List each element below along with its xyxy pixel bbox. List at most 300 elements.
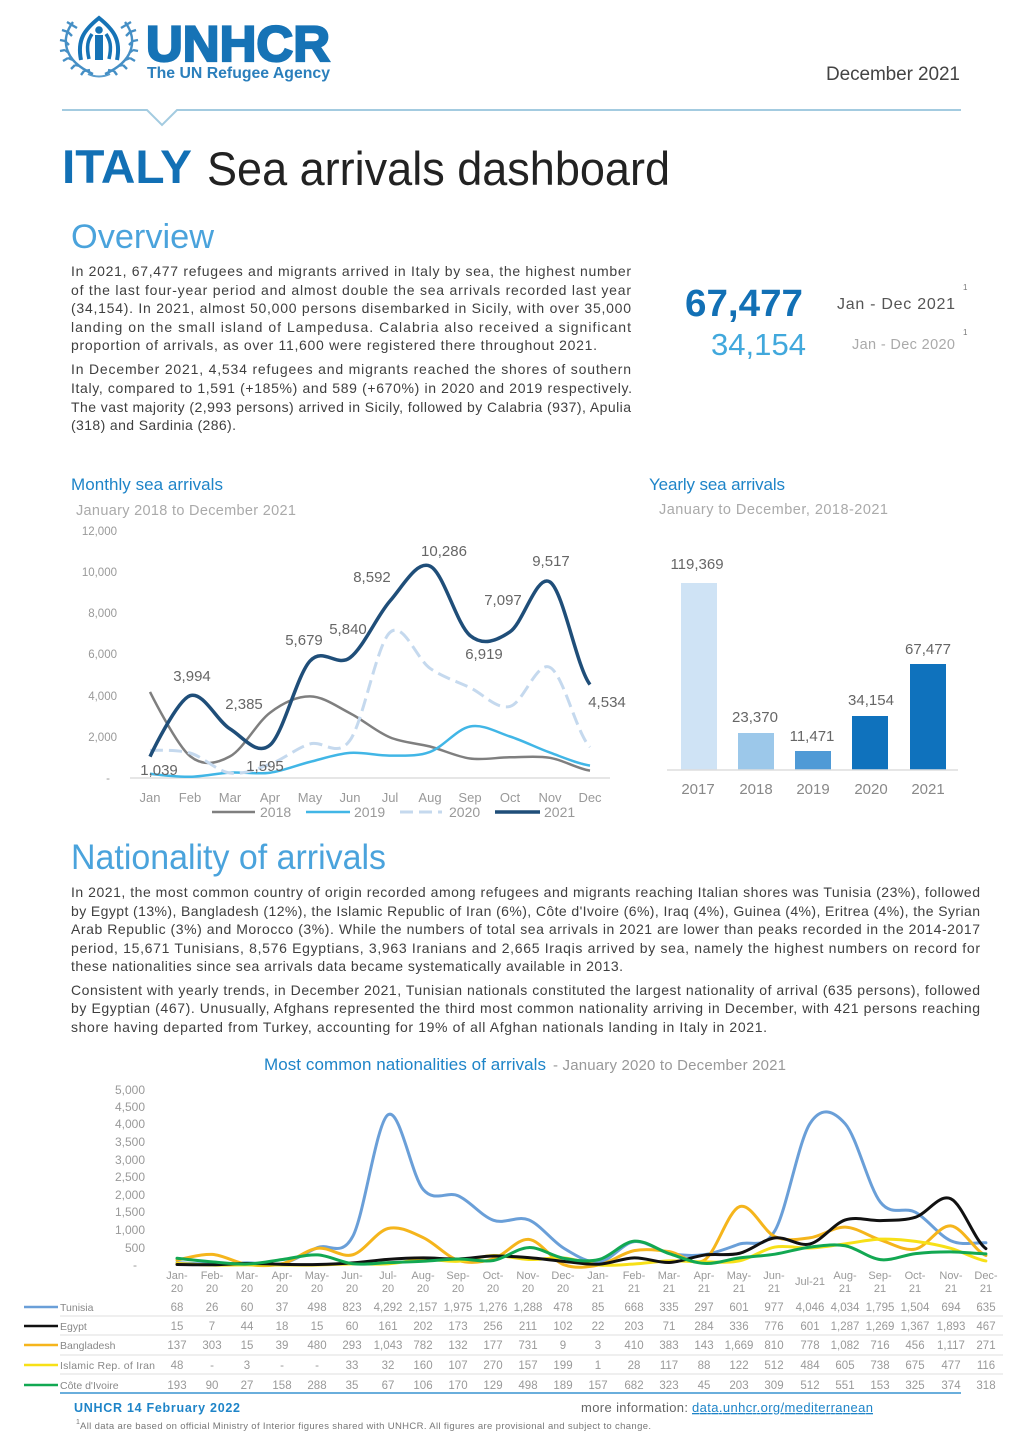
table row: Côte d'Ivoire: 325 [905, 1380, 925, 1392]
data labels: 7,097 [484, 592, 522, 609]
line chart: monthly arrivals [82, 526, 626, 820]
line chart: nationalities: Mar- [658, 1270, 681, 1282]
text block: overview: In December 2021, 4,534 refugees and migrants reached the shores of southern [71, 361, 631, 377]
table row: Egypt: 211 [519, 1321, 537, 1333]
data labels: 2,385 [225, 696, 263, 713]
line: 2018 [150, 692, 590, 771]
line chart: nationalities: Nov- [516, 1270, 540, 1282]
bar chart: yearly arrivals: 34,154 [848, 692, 894, 709]
table row: Islamic Rep. of Iran: 484 [800, 1360, 820, 1372]
icon: UNHCR emblem [60, 18, 138, 76]
line chart: nationalities: Jan- [166, 1270, 188, 1282]
table row: Tunisia: 85 [592, 1302, 604, 1314]
legend: 2018 [260, 804, 291, 820]
line chart: nationalities: Apr- [272, 1270, 293, 1282]
table row: Islamic Rep. of Iran: 270 [483, 1360, 503, 1372]
line chart: monthly arrivals: 6,000 [88, 649, 117, 661]
table row: Tunisia: 977 [764, 1302, 784, 1314]
data labels: 1,595 [246, 758, 284, 775]
title: ITALY [62, 140, 192, 193]
table row: Bangladesh: 1,669 [725, 1340, 753, 1352]
line chart: monthly arrivals: Feb [179, 790, 201, 805]
line chart: nationalities: 20 [241, 1283, 253, 1295]
line chart: nationalities: 20 [276, 1283, 288, 1295]
table row: Islamic Rep. of Iran: 3 [244, 1360, 250, 1372]
table row: Tunisia: 4,292 [374, 1302, 402, 1314]
logo wordmark: UNHCR [146, 16, 330, 72]
line: 2021 [150, 565, 590, 757]
line chart: monthly arrivals: Apr [260, 790, 281, 805]
text block: overview: proportion of arrivals, as over 11,600 were registered there throughout 2021. [71, 337, 597, 353]
table row: Egypt: 256 [483, 1321, 503, 1333]
subheading: yearly: January to December, 2018-2021 [659, 502, 888, 518]
data labels: 10,286 [421, 543, 467, 560]
line chart: nationalities: 3,000 [115, 1153, 145, 1167]
table row: Bangladesh: 15 [241, 1340, 253, 1352]
text block: nationality: shore having departed from Turkey, accounting for 19% of all Afghan nationals landing in Italy in 2021. [71, 1019, 767, 1035]
table row: Côte d'Ivoire: 309 [764, 1380, 784, 1392]
text block: overview: landing on the small island of Lampedusa. Calabria also received a significant [71, 319, 631, 335]
table row: Islamic Rep. of Iran: 107 [448, 1360, 468, 1372]
table row: Islamic Rep. of Iran: 122 [729, 1360, 749, 1372]
heading: monthly: Monthly sea arrivals [71, 475, 223, 494]
table row: Bangladesh: 1,043 [374, 1340, 402, 1352]
table row: Côte d'Ivoire: 67 [382, 1380, 394, 1392]
line chart: nationalities: 20 [206, 1283, 218, 1295]
table row: Bangladesh: 132 [448, 1340, 468, 1352]
chart heading: Most common nationalities of arrivals [264, 1055, 546, 1074]
table row: Egypt: Egypt [60, 1321, 87, 1333]
panel: yearly sea arrivals [649, 475, 958, 798]
bar chart: yearly arrivals: 11,471 [790, 728, 834, 745]
table row: Bangladesh: 271 [976, 1340, 996, 1352]
callout: totals [685, 283, 968, 362]
text block: overview: of the last four-year period and almost double the sea arrivals recorded last year [71, 282, 631, 298]
table row: Bangladesh: 143 [694, 1340, 714, 1352]
table row: Côte d'Ivoire: 158 [272, 1380, 292, 1392]
line chart: nationalities: - [133, 1258, 137, 1272]
line chart: monthly arrivals: Jul [382, 790, 398, 805]
line chart: nationalities: 21 [663, 1283, 675, 1295]
bar chart: yearly arrivals: 2019 [796, 781, 830, 798]
bar chart: yearly arrivals: 2017 [681, 781, 715, 798]
line chart: nationalities: Sep- [446, 1270, 470, 1282]
line: Bangladesh [177, 1206, 986, 1267]
table row: Egypt: 336 [729, 1321, 749, 1333]
table row: Tunisia: 1,288 [514, 1302, 542, 1314]
text block: overview: Italy, compared to 1,591 (+185%) and 589 (+670%) in 2020 and 2019 respectively. [71, 380, 632, 396]
table row: Bangladesh: 731 [518, 1340, 538, 1352]
table row: Egypt: 202 [413, 1321, 433, 1333]
line chart: nationalities: 2,000 [115, 1188, 145, 1202]
line chart: nationalities: 20 [487, 1283, 499, 1295]
table row: Egypt: 1,269 [866, 1321, 894, 1333]
table row: Côte d'Ivoire: 153 [870, 1380, 890, 1392]
table row: Egypt: 71 [663, 1321, 675, 1333]
data labels: 1,039 [140, 762, 178, 779]
table row: Tunisia: 823 [342, 1302, 362, 1314]
table row: Egypt: 22 [592, 1321, 604, 1333]
heading: overview: Overview [71, 218, 214, 256]
table row: Bangladesh: 137 [167, 1340, 187, 1352]
table row: Islamic Rep. of Iran: - [315, 1360, 319, 1372]
text block: nationality: In 2021, the most common country of origin recorded among refugees and migrants reaching Italian shores was Tunisia (23%), followed [71, 884, 980, 900]
heading: yearly: Yearly sea arrivals [649, 475, 785, 494]
line chart: nationalities: 21 [698, 1283, 710, 1295]
date: December 2021 [826, 64, 960, 85]
callout: totals: Jan - Dec 2020 [852, 337, 955, 353]
table row: Tunisia: Tunisia [60, 1302, 94, 1314]
table row: Tunisia: 4,034 [831, 1302, 860, 1314]
table row: Côte d'Ivoire: 170 [448, 1380, 468, 1392]
line chart: nationalities: Aug- [833, 1270, 857, 1282]
table row: Bangladesh [24, 1340, 996, 1352]
line chart: nationalities: 21 [909, 1283, 921, 1295]
table row: Tunisia: 297 [694, 1302, 714, 1314]
table row: Tunisia: 335 [659, 1302, 679, 1314]
table row: Côte d'Ivoire: 512 [800, 1380, 820, 1392]
bar chart: yearly arrivals: 2018 [739, 781, 773, 798]
table row: Islamic Rep. of Iran: - [210, 1360, 214, 1372]
table row: Bangladesh: 177 [483, 1340, 503, 1352]
data labels: 3,994 [173, 668, 211, 685]
line chart: monthly arrivals: 10,000 [82, 567, 117, 579]
line chart: nationalities: 500 [125, 1241, 145, 1255]
table row: Islamic Rep. of Iran: 33 [346, 1360, 358, 1372]
line chart: nationalities: 20 [346, 1283, 358, 1295]
line chart: nationalities: Apr- [694, 1270, 715, 1282]
table row: Islamic Rep. of Iran: 1 [595, 1360, 601, 1372]
line chart: nationalities: 20 [417, 1283, 429, 1295]
table row: Tunisia: 498 [307, 1302, 327, 1314]
data labels: 8,592 [353, 569, 391, 586]
text block: nationality [71, 884, 980, 1035]
table row: Egypt [24, 1321, 996, 1333]
table row: Côte d'Ivoire: 189 [553, 1380, 573, 1392]
more information link: more information: [581, 1400, 688, 1415]
line chart: nationalities: 1,000 [115, 1223, 145, 1237]
table row: Tunisia: 4,046 [796, 1302, 824, 1314]
table row: Côte d'Ivoire: 45 [698, 1380, 710, 1392]
more information link [581, 1400, 873, 1415]
line chart: nationalities: May- [727, 1270, 752, 1282]
table row: Egypt: 776 [764, 1321, 784, 1333]
line chart: monthly arrivals: May [298, 790, 323, 805]
data labels: 9,517 [532, 553, 570, 570]
logo tagline: The UN Refugee Agency [147, 65, 330, 82]
table row: Côte d'Ivoire: 374 [941, 1380, 961, 1392]
text block: overview [71, 263, 632, 433]
line chart: nationalities: 3,500 [115, 1135, 145, 1149]
data labels: 5,679 [285, 632, 323, 649]
table row: Côte d'Ivoire: 682 [624, 1380, 644, 1392]
data labels [140, 543, 626, 779]
data labels: 5,840 [329, 621, 367, 638]
line chart: monthly arrivals: Sep [458, 790, 482, 805]
table row: Bangladesh: 293 [342, 1340, 362, 1352]
line chart: nationalities: Oct- [483, 1270, 504, 1282]
table row: Egypt: 44 [241, 1321, 254, 1333]
chart heading: - January 2020 to December 2021 [553, 1057, 786, 1074]
line chart: nationalities: Jun- [341, 1270, 363, 1282]
table row: Tunisia: 37 [276, 1302, 288, 1314]
data labels: 4,534 [588, 694, 626, 711]
table row: Egypt: 173 [448, 1321, 468, 1333]
line chart: monthly arrivals: Nov [538, 790, 562, 805]
table row: Bangladesh: 810 [764, 1340, 784, 1352]
line chart: nationalities: 20 [452, 1283, 464, 1295]
table row: Côte d'Ivoire: 203 [729, 1380, 749, 1392]
source credit: UNHCR 14 February 2022 [74, 1401, 240, 1415]
text block: nationality: by Egyptian (467). Unusually, Afghans represented the third most common nationality arriving in December, with 421 persons reaching [71, 1000, 980, 1016]
line chart: nationalities: Mar- [236, 1270, 259, 1282]
text block: nationality: Consistent with yearly trends, in December 2021, Tunisian nationals constituted the largest nationality of arrival (635 persons), followed [71, 982, 980, 998]
bar chart: yearly arrivals: 119,369 [670, 556, 724, 573]
table row: Côte d'Ivoire: 193 [167, 1380, 187, 1392]
line chart: monthly arrivals: 2,000 [88, 732, 117, 744]
table row: Egypt: 15 [171, 1321, 183, 1333]
table row: Egypt: 1,287 [831, 1321, 859, 1333]
line: 2019 [150, 726, 590, 777]
table row: Egypt: 1,893 [937, 1321, 965, 1333]
table row: Côte d'Ivoire: 288 [307, 1380, 327, 1392]
table row: Tunisia: 668 [624, 1302, 644, 1314]
table row: Islamic Rep. of Iran: 48 [171, 1360, 183, 1372]
table row: Tunisia: 1,795 [866, 1302, 894, 1314]
line chart: nationalities: Jan- [587, 1270, 609, 1282]
table row: Côte d'Ivoire: 106 [413, 1380, 433, 1392]
line chart: nationalities: Nov- [939, 1270, 963, 1282]
table row: Egypt: 7 [209, 1321, 215, 1333]
table row: Egypt: 18 [276, 1321, 288, 1333]
line chart: nationalities: 5,000 [115, 1083, 145, 1097]
line: Côte d'Ivoire [177, 1241, 986, 1264]
line chart: nationalities: Sep- [868, 1270, 892, 1282]
table row: Côte d'Ivoire: 27 [241, 1380, 253, 1392]
table row: Tunisia: 26 [206, 1302, 218, 1314]
panel: nationality of arrivals [24, 838, 1003, 1392]
table row: Bangladesh: 480 [307, 1340, 327, 1352]
table row: Bangladesh: 3 [595, 1340, 601, 1352]
table row: Egypt: 203 [624, 1321, 644, 1333]
callout: totals: 1 [963, 328, 968, 337]
line chart: nationalities: 21 [945, 1283, 957, 1295]
line chart: nationalities: May- [305, 1270, 330, 1282]
table row: Tunisia: 635 [976, 1302, 996, 1314]
line chart: nationalities: Feb- [201, 1270, 224, 1282]
text block: nationality: by Egypt (13%), Bangladesh (12%), the Islamic Republic of Iran (6%), Côte d'Ivoire (6%), Iraq (4%), Guinea (4%), Eritrea (4%), the Syrian [71, 903, 980, 919]
bar chart: yearly arrivals: 2021 [911, 781, 945, 798]
line chart: monthly arrivals: Dec [578, 790, 602, 805]
table row: Tunisia [24, 1302, 996, 1314]
table row: Islamic Rep. of Iran [24, 1360, 995, 1372]
table row: Egypt: 467 [976, 1321, 996, 1333]
line chart: nationalities: 4,500 [115, 1100, 145, 1114]
table row: Egypt: 60 [346, 1321, 358, 1333]
table row: Islamic Rep. of Iran: 512 [764, 1360, 784, 1372]
table row: Côte d'Ivoire: 318 [976, 1380, 996, 1392]
data labels: 6,919 [465, 646, 503, 663]
footnote: All data are based on official Ministry of Interior figures shared with UNHCR. All figures are provisional and subject to change. [80, 1421, 651, 1432]
callout: totals: 1 [963, 283, 968, 292]
bar chart: yearly arrivals: 23,370 [732, 709, 778, 726]
line: Islamic Rep. of Iran [177, 1239, 986, 1265]
text block: nationality: period, 15,671 Tunisians, 8,576 Egyptians, 3,963 Iranians and 2,665 Iraqis arrived by sea, namely the highest numbers on record for [71, 940, 980, 956]
table row: Islamic Rep. of Iran: 28 [628, 1360, 640, 1372]
line chart: nationalities: 21 [839, 1283, 851, 1295]
table row: Egypt: 161 [378, 1321, 398, 1333]
line chart: nationalities [115, 1083, 998, 1295]
line chart: monthly arrivals: - [106, 773, 110, 785]
line: Egypt [177, 1198, 986, 1265]
table row: Bangladesh: 456 [905, 1340, 925, 1352]
legend: 2020 [449, 804, 480, 820]
line chart: nationalities: Jul-21 [795, 1276, 825, 1288]
table row: Côte d'Ivoire: 551 [835, 1380, 855, 1392]
table row: Côte d'Ivoire: 157 [588, 1380, 608, 1392]
table row: Côte d'Ivoire: 498 [518, 1380, 538, 1392]
table row: Islamic Rep. of Iran: 199 [553, 1360, 573, 1372]
table row: Egypt: 15 [311, 1321, 323, 1333]
line chart: monthly arrivals: 8,000 [88, 608, 117, 620]
line chart: nationalities: 20 [557, 1283, 569, 1295]
line chart: nationalities: Feb- [623, 1270, 646, 1282]
line chart: nationalities: Dec- [551, 1270, 575, 1282]
line chart: nationalities: Oct- [905, 1270, 926, 1282]
table row: Côte d'Ivoire [24, 1380, 996, 1392]
panel: overview [71, 218, 968, 433]
table row: Bangladesh: 1,117 [937, 1340, 965, 1352]
line chart: nationalities: 21 [980, 1283, 992, 1295]
line chart: monthly arrivals: Jan [140, 790, 160, 805]
table row: Islamic Rep. of Iran: 160 [413, 1360, 433, 1372]
bar chart: yearly arrivals: 67,477 [905, 641, 951, 658]
table row: Islamic Rep. of Iran: 157 [518, 1360, 538, 1372]
text block: nationality: these nationalities since sea arrivals data became systematically available in 2013. [71, 958, 623, 974]
line: 2020 [150, 630, 590, 773]
table row: Côte d'Ivoire: 323 [659, 1380, 679, 1392]
line chart: monthly arrivals: Mar [219, 790, 242, 805]
line chart: monthly arrivals: 4,000 [88, 691, 117, 703]
table row: Islamic Rep. of Iran: 32 [382, 1360, 394, 1372]
text block: nationality: Arab Republic (3%) and Morocco (3%). While the numbers of total sea arrivals in 2021 are lower than peaks recorded in the 2014-2017 [71, 921, 980, 937]
table row: Bangladesh: 778 [800, 1340, 820, 1352]
line chart: nationalities: Aug- [411, 1270, 435, 1282]
line chart: monthly arrivals: Aug [418, 790, 442, 805]
line chart: nationalities: 21 [628, 1283, 640, 1295]
table row: Islamic Rep. of Iran: Islamic Rep. of Iran [60, 1360, 155, 1372]
panel: monthly sea arrivals [71, 475, 626, 820]
line chart: monthly arrivals: 12,000 [82, 526, 117, 538]
legend: 2019 [354, 804, 385, 820]
text block: overview: (318) and Sardinia (286). [71, 417, 236, 433]
table row: Bangladesh: 716 [870, 1340, 890, 1352]
legend: 2021 [544, 804, 575, 820]
line chart: nationalities: 21 [733, 1283, 745, 1295]
chart heading [264, 1055, 786, 1074]
table row: Tunisia: 1,504 [901, 1302, 930, 1314]
line chart: nationalities: 4,000 [115, 1117, 145, 1131]
table row: Islamic Rep. of Iran: 477 [941, 1360, 961, 1372]
line chart: nationalities: Jul- [379, 1270, 397, 1282]
line chart: monthly arrivals: Jun [340, 790, 360, 805]
line chart: nationalities: 20 [382, 1283, 394, 1295]
text block: overview: (34,154). In 2021, almost 50,000 persons disembarked in Sicily, with over 35,000 [71, 300, 631, 316]
table row: Bangladesh: Bangladesh [60, 1340, 116, 1352]
table row: Bangladesh: 1,082 [831, 1340, 859, 1352]
table row: Islamic Rep. of Iran: - [280, 1360, 284, 1372]
table row: Côte d'Ivoire: 129 [483, 1380, 503, 1392]
table row: Tunisia: 60 [241, 1302, 253, 1314]
table row: Bangladesh: 383 [659, 1340, 679, 1352]
line chart: nationalities: 20 [171, 1283, 183, 1295]
line chart: nationalities: 2,500 [115, 1170, 145, 1184]
bar chart: yearly arrivals: 2020 [854, 781, 888, 798]
line chart: nationalities: 21 [592, 1283, 604, 1295]
table row: Bangladesh: 782 [413, 1340, 433, 1352]
table row: Islamic Rep. of Iran: 675 [905, 1360, 925, 1372]
table row: Tunisia: 68 [171, 1302, 183, 1314]
table row: Islamic Rep. of Iran: 116 [977, 1360, 995, 1372]
header [60, 16, 961, 125]
table row: Bangladesh: 9 [560, 1340, 566, 1352]
line chart: nationalities: 20 [311, 1283, 323, 1295]
title: Sea arrivals dashboard [207, 142, 670, 195]
table row: Tunisia: 1,975 [444, 1302, 472, 1314]
text block: overview: In 2021, 67,477 refugees and migrants arrived in Italy by sea, the highest number [71, 263, 631, 279]
line chart: monthly arrivals: Oct [500, 790, 520, 805]
line chart: nationalities: 1,500 [115, 1205, 145, 1219]
line chart: nationalities: 21 [874, 1283, 886, 1295]
footer [60, 1393, 961, 1432]
heading: nationality: Nationality of arrivals [71, 838, 386, 877]
bar chart: yearly arrivals [667, 556, 958, 798]
more information link: data.unhcr.org/mediterranean [692, 1400, 873, 1415]
legend [212, 804, 575, 820]
table row: Bangladesh: 39 [276, 1340, 288, 1352]
table row: Egypt: 601 [800, 1321, 820, 1333]
callout: totals: 67,477 [685, 283, 803, 325]
line chart: nationalities: Dec- [974, 1270, 998, 1282]
table row: Côte d'Ivoire: 90 [206, 1380, 218, 1392]
table row: Egypt: 284 [694, 1321, 714, 1333]
table row: Islamic Rep. of Iran: 117 [660, 1360, 678, 1372]
line chart: nationalities: Jun- [763, 1270, 785, 1282]
text block: overview: The vast majority (2,993 persons) arrived in Sicily, followed by Calabria (937), Apulia [71, 399, 631, 415]
table row: Côte d'Ivoire: 35 [346, 1380, 358, 1392]
line chart: nationalities: 20 [522, 1283, 534, 1295]
table row: Tunisia: 2,157 [409, 1302, 437, 1314]
table row: Bangladesh: 303 [202, 1340, 222, 1352]
table row: Islamic Rep. of Iran: 88 [698, 1360, 710, 1372]
table row: Egypt: 102 [553, 1321, 573, 1333]
table row: Tunisia: 1,276 [479, 1302, 507, 1314]
table row: Côte d'Ivoire: Côte d'Ivoire [60, 1380, 119, 1392]
table row: Egypt: 1,367 [901, 1321, 929, 1333]
table row: Tunisia: 478 [553, 1302, 573, 1314]
data table: nationalities [24, 1302, 1003, 1392]
callout: totals: Jan - Dec 2021 [837, 296, 955, 313]
line chart: nationalities: 21 [768, 1283, 780, 1295]
table row: Islamic Rep. of Iran: 605 [835, 1360, 855, 1372]
table row: Bangladesh: 410 [624, 1340, 644, 1352]
table row: Tunisia: 694 [941, 1302, 961, 1314]
line: Tunisia [177, 1112, 986, 1265]
table row: Islamic Rep. of Iran: 738 [870, 1360, 890, 1372]
callout: totals: 34,154 [711, 327, 806, 362]
footnote: 1 [76, 1419, 80, 1426]
subheading: monthly: January 2018 to December 2021 [76, 503, 296, 519]
